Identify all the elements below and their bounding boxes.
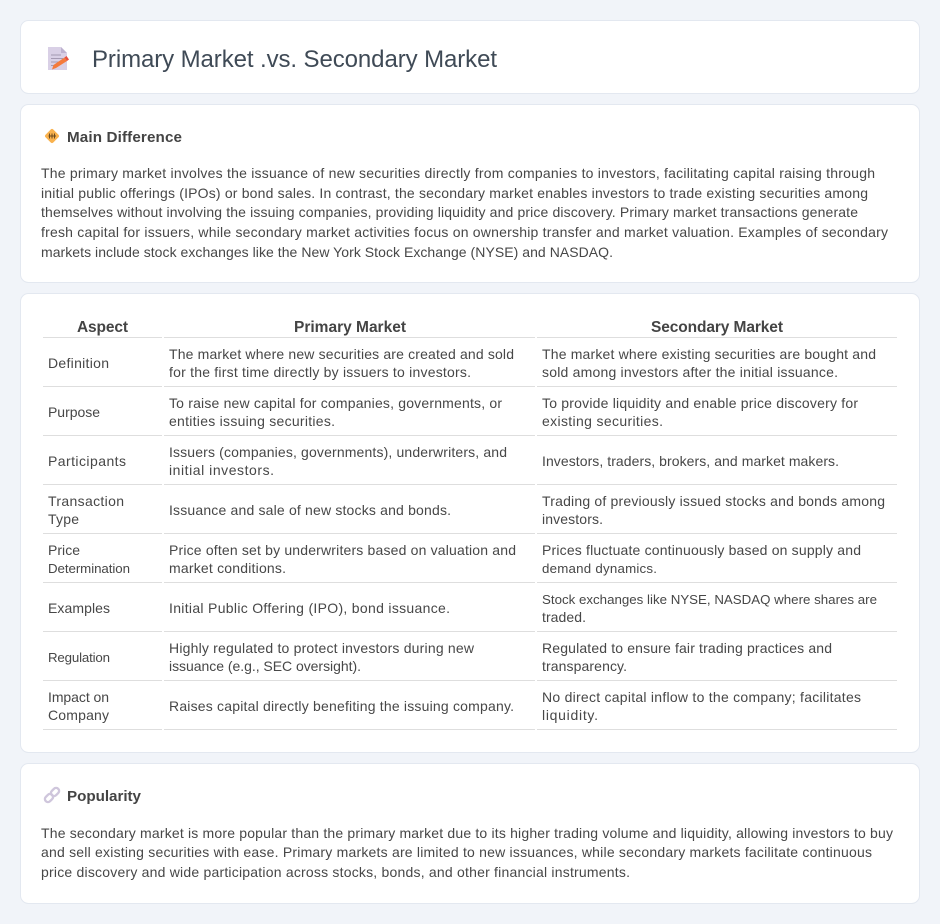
text block: popularity paragraph: The secondary market is more popular than the primary market due to its higher trading volume and liquidity, allowing investors to buy [41,825,893,841]
text block: popularity paragraph: and sell existing securities with ease. Primary markets are limited to new issuances, while secondary markets facilitate continuous [41,844,872,860]
text block: main difference paragraph: The primary market involves the issuance of new securities directly from companies to investors, facilitating capital raising through [41,165,875,181]
table row: impact on company [43,689,897,730]
title: Primary Market .vs. Secondary Market [92,46,497,73]
panel: main difference [20,104,920,282]
table row: definition: Definition [48,355,109,371]
text block: popularity paragraph: price discovery and wide participation across stocks, bonds, and other financial instruments. [41,864,630,880]
table row: impact on company: Company [48,707,109,723]
table row: purpose [43,395,897,436]
table row: purpose: entities issuing securities. [169,413,335,429]
table row: purpose: To raise new capital for companies, governments, or [169,395,502,411]
table row: regulation: Highly regulated to protect investors during new [169,640,475,656]
table row: price determination: Determination [48,561,130,576]
table row: participants: initial investors. [169,462,274,478]
table row: impact on company: Impact on [48,689,109,705]
table row: participants [43,444,897,485]
table row: impact on company: liquidity. [542,707,598,723]
table row: participants: Issuers (companies, governments), underwriters, and [169,444,507,460]
table row: definition: The market where new securities are created and sold [169,346,514,362]
panel: comparison table [20,294,920,752]
table row: price determination: market conditions. [169,560,286,576]
table row: transaction type [43,493,897,534]
table row: price determination [43,542,897,583]
text block: popularity paragraph [41,825,893,880]
text block: main difference paragraph: markets include stock exchanges like the New York Stock Exchange (NYSE) and NASDAQ. [41,244,613,260]
icon: chain link [44,787,60,803]
table row: examples: Initial Public Offering (IPO), bond issuance. [169,600,450,616]
table row: impact on company: Raises capital directly benefiting the issuing company. [169,698,514,714]
table row: purpose: existing securities. [542,413,663,429]
text block: main difference paragraph: fresh capital for issuers, while secondary market activities focus on ownership transfer and market valuation. Examples of secondary [41,224,888,240]
table row: examples: Examples [48,600,110,616]
table row: transaction type: investors. [542,511,603,527]
panel: title header [20,20,920,94]
table row: regulation: Regulation [48,650,110,665]
icon: diamond sign [44,128,60,144]
heading: popularity: Popularity [67,788,142,805]
table row: definition: The market where existing securities are bought and [542,346,876,362]
table row: impact on company: No direct capital inflow to the company; facilitates [542,689,861,705]
table row: price determination: Price often set by underwriters based on valuation and [169,542,516,558]
table row: transaction type: Trading of previously issued stocks and bonds among [542,493,885,509]
table header row: Secondary Market [651,319,783,336]
table row: transaction type: Type [48,511,79,527]
table row: examples: Stock exchanges like NYSE, NASDAQ where shares are [542,592,877,607]
table row: price determination: Prices fluctuate continuously based on supply and [542,542,861,558]
table row: definition [43,346,897,387]
icon: document with pencil [48,47,69,70]
table row: transaction type: Transaction [48,493,124,509]
panel: popularity [20,764,920,904]
heading: main difference: Main Difference [67,129,182,146]
table row: examples [43,592,897,632]
table row: price determination: Price [48,542,80,558]
text block: main difference paragraph: initial public offerings (IPOs) or bond sales. In contrast, the secondary market enables investors to trade existing securities among [41,185,868,201]
table row: examples: traded. [542,609,586,625]
table row: regulation: Regulated to ensure fair trading practices and [542,640,832,656]
table row: participants: Investors, traders, brokers, and market makers. [542,453,839,469]
table row: definition: sold among investors after the initial issuance. [542,364,838,380]
table row: transaction type: Issuance and sale of new stocks and bonds. [169,502,451,518]
table row: regulation: issuance (e.g., SEC oversight). [169,658,361,674]
text block: main difference paragraph [41,165,888,260]
table row: purpose: To provide liquidity and enable price discovery for [542,395,858,411]
table row: participants: Participants [48,453,126,469]
table header row [43,319,897,338]
table row: regulation: transparency. [542,658,627,674]
text block: main difference paragraph: themselves without involving the issuing companies, providing liquidity and price discovery. Primary market transactions generate [41,204,858,220]
table row: purpose: Purpose [48,404,100,420]
table row: regulation [43,640,897,681]
table header row: Primary Market [294,319,406,336]
table row: definition: for the first time directly by issuers to investors. [169,364,471,380]
table header row: Aspect [77,319,128,336]
table row: price determination: demand dynamics. [542,561,657,576]
